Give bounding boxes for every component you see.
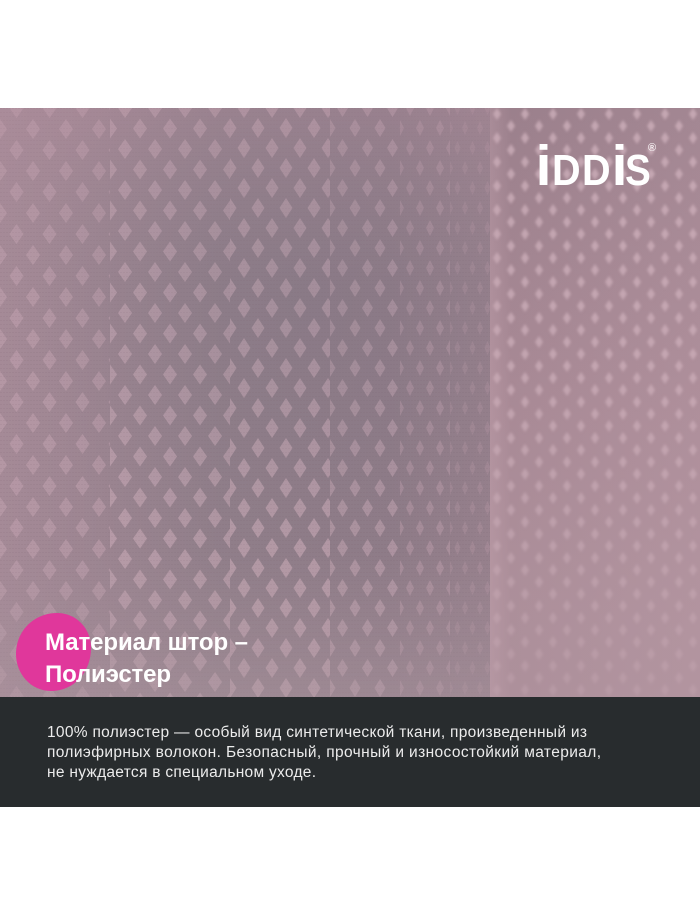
logo: IDDIS: D [552, 145, 581, 194]
heading: Материал штор – [45, 629, 248, 656]
text block: description: полиэфирных волокон. Безопасный, прочный и износостойкий материал, [47, 744, 601, 761]
panel: dark description band [0, 697, 700, 807]
panel: fabric photo, right soft-focus [490, 108, 700, 697]
text block: description: не нуждается в специальном уходе. [47, 764, 316, 781]
heading [45, 629, 248, 688]
logo: IDDIS: i [612, 134, 627, 198]
logo: IDDIS: ® [648, 142, 656, 154]
logo: IDDIS: i [536, 134, 551, 198]
panel: fabric photo, left close-up [0, 108, 490, 697]
logo: IDDIS: S [625, 145, 651, 195]
icon: pink accent blob [16, 613, 91, 691]
text block: description [47, 724, 601, 781]
logo: IDDIS: D [582, 145, 611, 194]
text block: description: 100% полиэстер — особый вид синтетической ткани, произведенный из [47, 724, 587, 741]
logo: IDDIS [536, 134, 656, 198]
heading: Полиэстер [45, 661, 171, 688]
